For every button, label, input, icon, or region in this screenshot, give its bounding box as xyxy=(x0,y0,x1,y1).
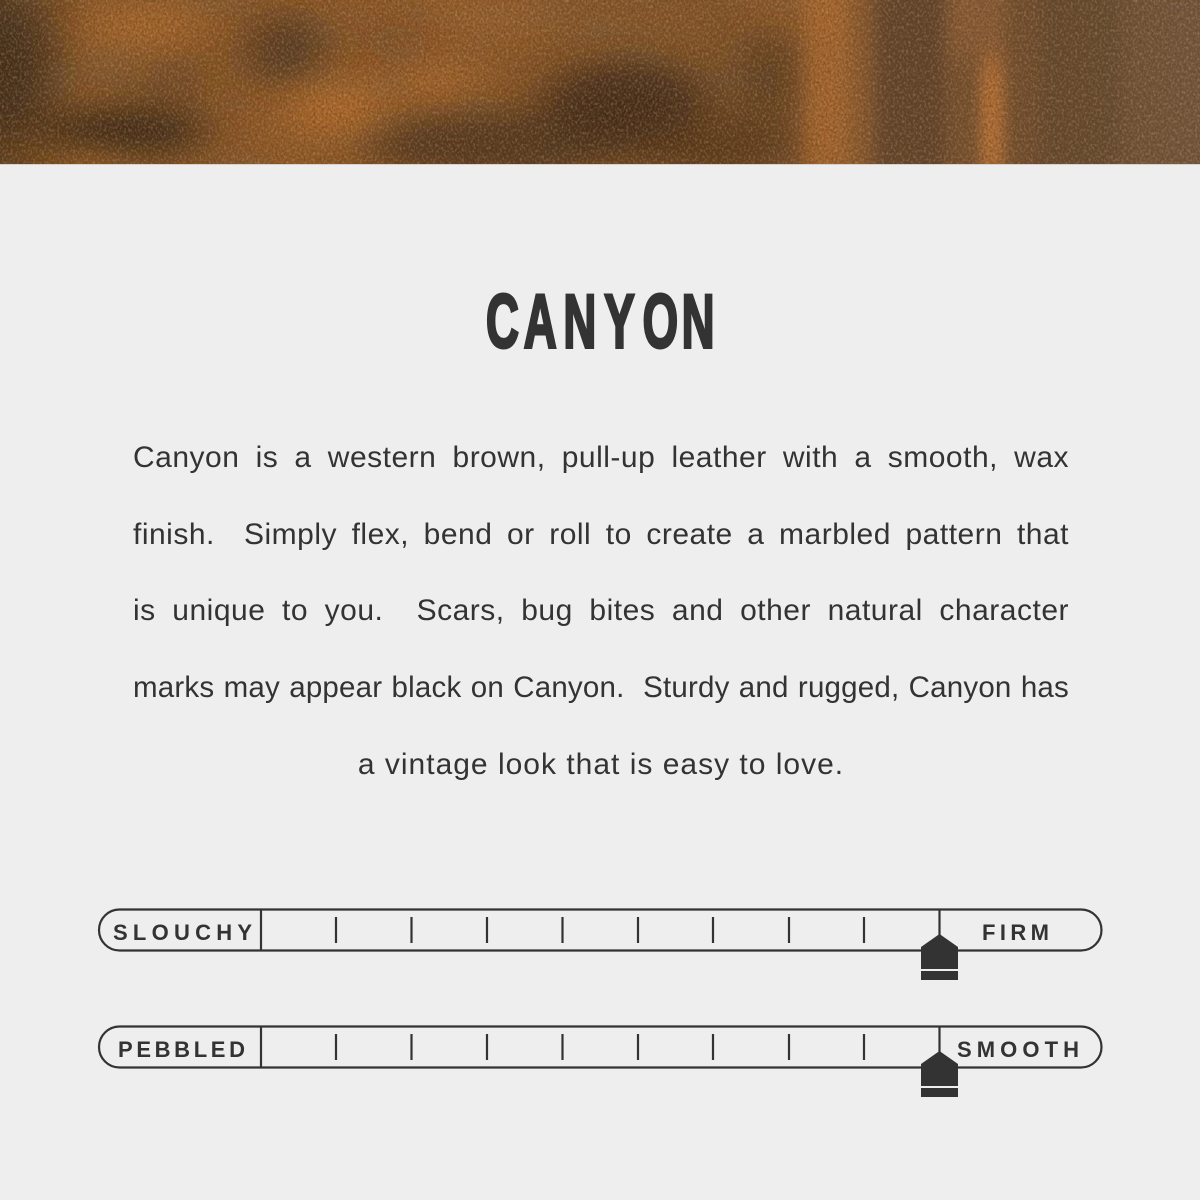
body description text: a vintage look that is easy to love. xyxy=(358,748,844,781)
scale: pebbled to smooth xyxy=(98,1025,1103,1097)
label: slouchy: SLOUCHY xyxy=(113,920,252,945)
body description text xyxy=(133,441,1069,781)
scale: slouchy to firm xyxy=(98,908,1103,980)
body description text: is unique to you. Scars, bug bites and other natural character xyxy=(133,594,1069,627)
body description text: finish. Simply flex, bend or roll to create a marbled pattern that xyxy=(133,518,1069,551)
label: smooth: SMOOTH xyxy=(957,1037,1079,1062)
marker xyxy=(921,934,958,980)
label: pebbled: PEBBLED xyxy=(118,1037,245,1062)
body description text: marks may appear black on Canyon. Sturdy and rugged, Canyon has xyxy=(133,671,1069,704)
body description text: Canyon is a western brown, pull-up leather with a smooth, wax xyxy=(133,441,1069,474)
title: CANYON xyxy=(486,280,715,364)
marker xyxy=(921,1051,958,1097)
scale track xyxy=(99,909,1102,951)
scale track xyxy=(99,1026,1102,1068)
label: firm: FIRM xyxy=(982,920,1049,945)
leather photo banner xyxy=(0,0,1200,165)
